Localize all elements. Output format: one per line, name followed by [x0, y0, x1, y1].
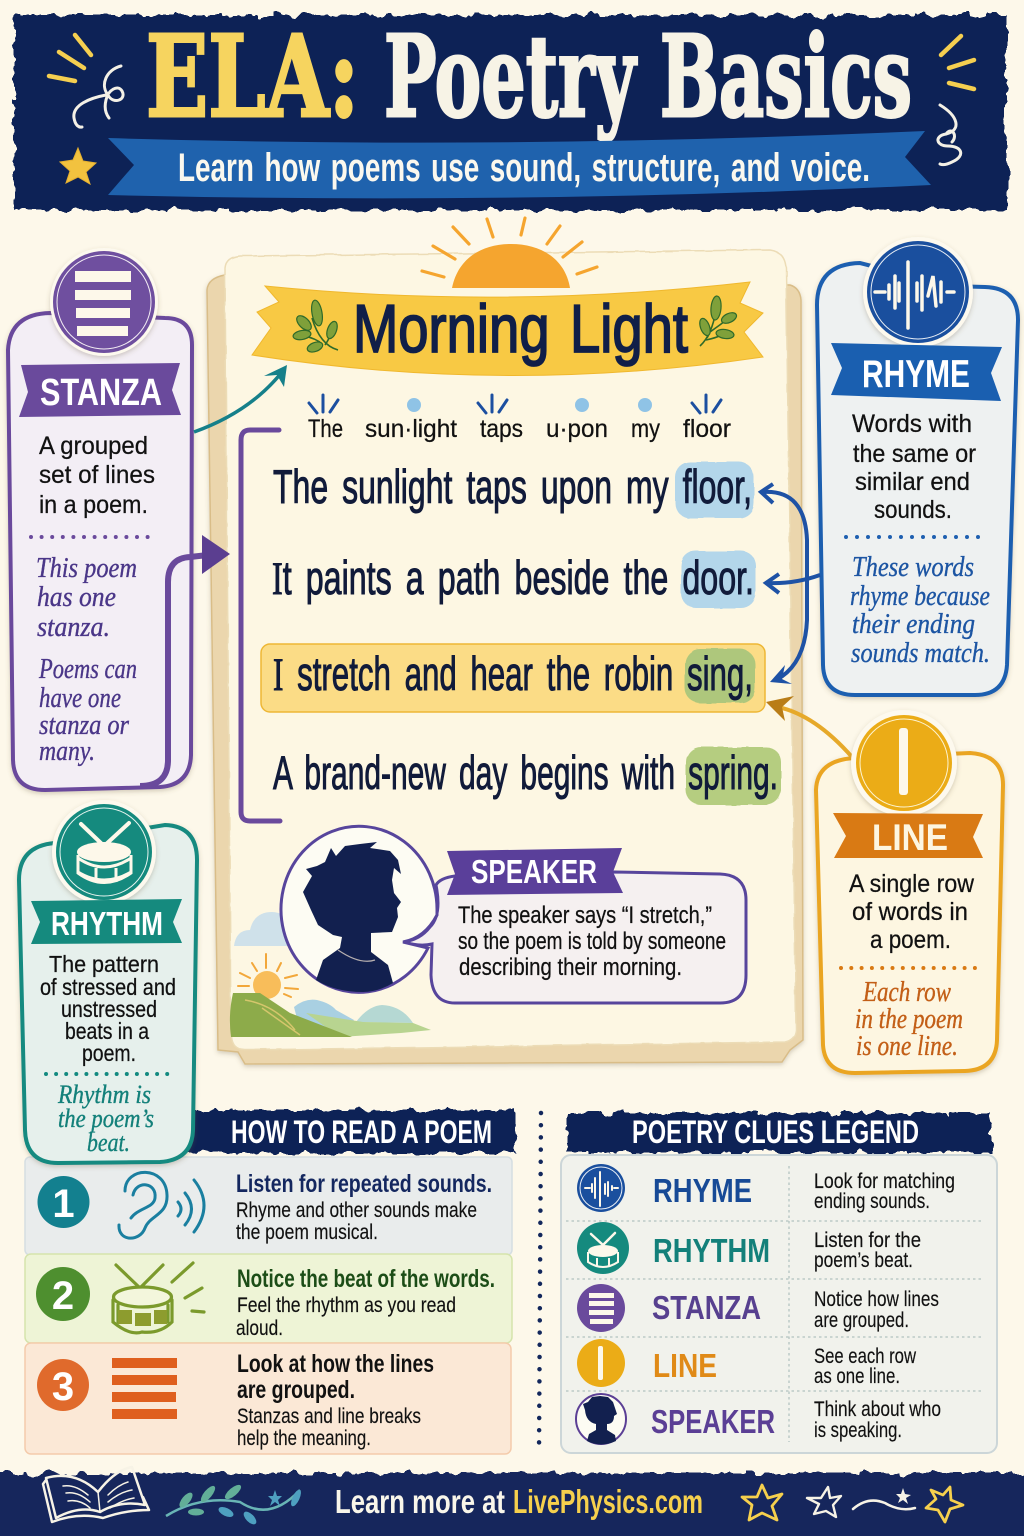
scansion words: u·pon: [546, 415, 608, 443]
rhyme definition: [852, 410, 976, 524]
landscape: [230, 912, 431, 1037]
footer link: Learn more at: [335, 1483, 505, 1520]
rhyme note: rhyme because: [850, 581, 990, 612]
arrows: rhyme links: [761, 484, 820, 684]
legend row: rhythm: RHYTHM: [653, 1232, 770, 1269]
icon: open book: [43, 1467, 149, 1522]
step 1: 1: [52, 1182, 75, 1226]
rhythm note: Rhythm is: [57, 1080, 151, 1109]
speaker portrait circle: [281, 826, 437, 992]
stanza definition: [39, 432, 155, 519]
speaker text: describing their morning.: [459, 954, 682, 981]
how to heading banner: HOW TO READ A POEM: [231, 1114, 492, 1150]
stanza definition: A grouped: [39, 432, 148, 460]
step 1: [25, 1157, 512, 1255]
legend row: rhyme: [577, 1164, 955, 1213]
how to heading banner: [180, 1110, 516, 1153]
rhythm definition: The pattern: [49, 951, 159, 977]
step 3: help the meaning.: [237, 1427, 371, 1450]
rhyme note: their ending: [852, 609, 975, 640]
step 3: are grouped.: [237, 1376, 355, 1404]
stanza ribbon: [19, 363, 181, 417]
legend row: rhythm: [577, 1222, 921, 1274]
scansion words: [308, 415, 731, 443]
rhythm definition: of stressed and: [40, 974, 176, 1000]
rhythm ribbon: RHYTHM: [51, 905, 163, 942]
legend row: rhythm: Listen for the: [814, 1229, 921, 1252]
speaker text: [458, 902, 726, 981]
line note: [855, 977, 963, 1062]
rhythm definition: beats in a: [65, 1018, 149, 1044]
icon: left leaf sprig: [292, 299, 339, 354]
legend panel: [561, 1113, 997, 1453]
panel: rhythm: [19, 800, 197, 1163]
icon: line: [851, 710, 957, 816]
rhyme definition: Words with: [852, 410, 972, 438]
step 3: [25, 1343, 511, 1454]
legend row: rhyme: RHYME: [653, 1172, 752, 1209]
step 2: Notice the beat of the words.: [237, 1265, 495, 1293]
legend row: stanza: [577, 1284, 939, 1332]
unstressed dots: [407, 398, 652, 412]
highlight: line row: [261, 644, 765, 712]
arrow: stanza to title: [194, 365, 287, 432]
poem paper: [207, 218, 803, 1064]
step 1: Listen for repeated sounds.: [236, 1170, 492, 1198]
rhythm note: the poem’s: [58, 1104, 154, 1133]
rhyme definition: similar end: [855, 468, 970, 496]
step 1: Rhyme and other sounds make: [236, 1199, 477, 1222]
stanza note: many.: [39, 736, 95, 767]
rhyme note: [850, 552, 990, 669]
step 3: 3: [52, 1365, 74, 1409]
header banner: [14, 12, 1007, 210]
poem lines: [272, 460, 778, 799]
stanza bracket: [241, 430, 280, 821]
icon: leafy sprig: [166, 1483, 303, 1526]
poem title ribbon: Morning Light: [353, 291, 688, 367]
scansion words: The: [308, 415, 343, 443]
title: ELA:: [146, 12, 359, 143]
legend row: stanza: Notice how lines: [814, 1288, 939, 1311]
poem title ribbon: [252, 282, 763, 376]
legend row: rhyme: Look for matching: [814, 1170, 955, 1193]
stanza note: stanza.: [37, 612, 110, 643]
rhyme definition: sounds.: [874, 496, 952, 524]
stress marks: [309, 395, 721, 413]
line note: is one line.: [856, 1031, 958, 1062]
legend heading banner: POETRY CLUES LEGEND: [632, 1114, 919, 1150]
title: [146, 12, 912, 143]
highlights: rhyme words: [675, 462, 781, 805]
subtitle ribbon: [108, 131, 931, 198]
scansion words: sun·light: [365, 415, 457, 443]
line note: Each row: [862, 977, 951, 1008]
speaker ribbon: SPEAKER: [471, 853, 597, 890]
scansion words: my: [631, 415, 660, 443]
speaker silhouette: [303, 842, 401, 992]
poem lines: It paints a path beside the door.: [272, 551, 754, 605]
header doodles: [49, 35, 974, 165]
step 3: Stanzas and line breaks: [237, 1405, 421, 1428]
speaker text: so the poem is told by someone: [458, 928, 726, 955]
stanza ribbon: STANZA: [40, 372, 162, 414]
line definition: of words in: [852, 898, 968, 926]
stanza note: [36, 553, 137, 767]
speaker ribbon: [447, 848, 623, 895]
rhyme definition: the same or: [853, 440, 976, 468]
footer link: [335, 1483, 703, 1520]
legend row: stanza: are grouped.: [814, 1309, 909, 1332]
step 2: [25, 1254, 512, 1343]
stanza note: stanza or: [39, 710, 129, 741]
line definition: [849, 870, 975, 954]
scansion row: [308, 395, 731, 443]
footer link: LivePhysics.com: [513, 1483, 703, 1520]
legend row: line: LINE: [653, 1347, 717, 1384]
speaker text: The speaker says “I stretch,”: [458, 902, 712, 929]
legend row: line: See each row: [814, 1345, 917, 1368]
icon: stanza lines: [50, 248, 158, 356]
rhyme note: These words: [852, 552, 974, 583]
rhythm definition: poem.: [82, 1040, 136, 1066]
legend row: speaker: [576, 1394, 941, 1444]
legend row: line: as one line.: [814, 1365, 900, 1388]
legend row: rhyme: ending sounds.: [814, 1190, 930, 1213]
icon: gold star: [60, 148, 96, 184]
legend row: stanza: STANZA: [652, 1289, 761, 1326]
legend row: rhythm: poem’s beat.: [814, 1249, 913, 1272]
scansion words: floor: [683, 415, 731, 443]
rhythm note: [57, 1080, 154, 1157]
stanza note: has one: [37, 582, 116, 613]
stanza note: have one: [39, 683, 121, 714]
legend box: [561, 1155, 997, 1453]
step 2: 2: [52, 1274, 74, 1318]
arrow: line to poem: [766, 696, 852, 757]
rhyme note: sounds match.: [851, 638, 990, 669]
line ribbon: [833, 813, 983, 858]
speaker callout: [230, 826, 746, 1037]
step 1: the poem musical.: [236, 1221, 378, 1244]
rhythm definition: [40, 951, 176, 1066]
rhythm ribbon: [31, 899, 182, 944]
legend grid: [566, 1166, 983, 1442]
stanza definition: set of lines: [39, 461, 155, 489]
rhyme ribbon: [831, 343, 1002, 401]
line definition: A single row: [849, 870, 975, 898]
icon: drum: [113, 1263, 204, 1333]
stanza note: Poems can: [38, 654, 137, 685]
stanza definition: in a poem.: [39, 491, 148, 519]
icon: lines: [112, 1358, 177, 1419]
panel: line: [766, 696, 1003, 1073]
line note: in the poem: [855, 1004, 963, 1035]
arrow: stanza to poem: [140, 535, 230, 786]
panel: stanza: [8, 248, 230, 790]
scansion words: taps: [480, 415, 523, 443]
legend row: speaker: is speaking.: [814, 1419, 902, 1442]
dotted column divider: [539, 1113, 541, 1454]
icon: ear: [119, 1172, 204, 1238]
line ribbon: LINE: [872, 817, 948, 858]
footer banner: [0, 1467, 1024, 1536]
rhythm note: beat.: [87, 1128, 130, 1157]
legend row: speaker: Think about who: [814, 1398, 941, 1421]
legend row: line: [577, 1339, 917, 1388]
stanza note: This poem: [36, 553, 137, 584]
rhyme ribbon: RHYME: [862, 353, 970, 396]
rhythm definition: unstressed: [61, 996, 157, 1022]
how to read panel: [25, 1110, 516, 1454]
icon: sound wave: [863, 237, 973, 347]
step 2: aloud.: [236, 1317, 283, 1340]
icon: right leaf sprig: [698, 296, 738, 346]
speaker necklace: [338, 950, 375, 961]
poem lines: I stretch and hear the robin sing,: [273, 647, 753, 701]
legend row: speaker: SPEAKER: [651, 1403, 775, 1440]
step 3: Look at how the lines: [237, 1350, 434, 1378]
icon: footer stars: [742, 1485, 963, 1522]
poem lines: The sunlight taps upon my floor,: [273, 460, 752, 513]
line definition: a poem.: [870, 926, 951, 954]
speaker bubble: [403, 872, 746, 1003]
icon: rhythm drum: [52, 800, 156, 904]
step 2: Feel the rhythm as you read: [237, 1294, 456, 1317]
panel: rhyme: [817, 237, 1018, 695]
icon: rising sun: [422, 218, 597, 288]
